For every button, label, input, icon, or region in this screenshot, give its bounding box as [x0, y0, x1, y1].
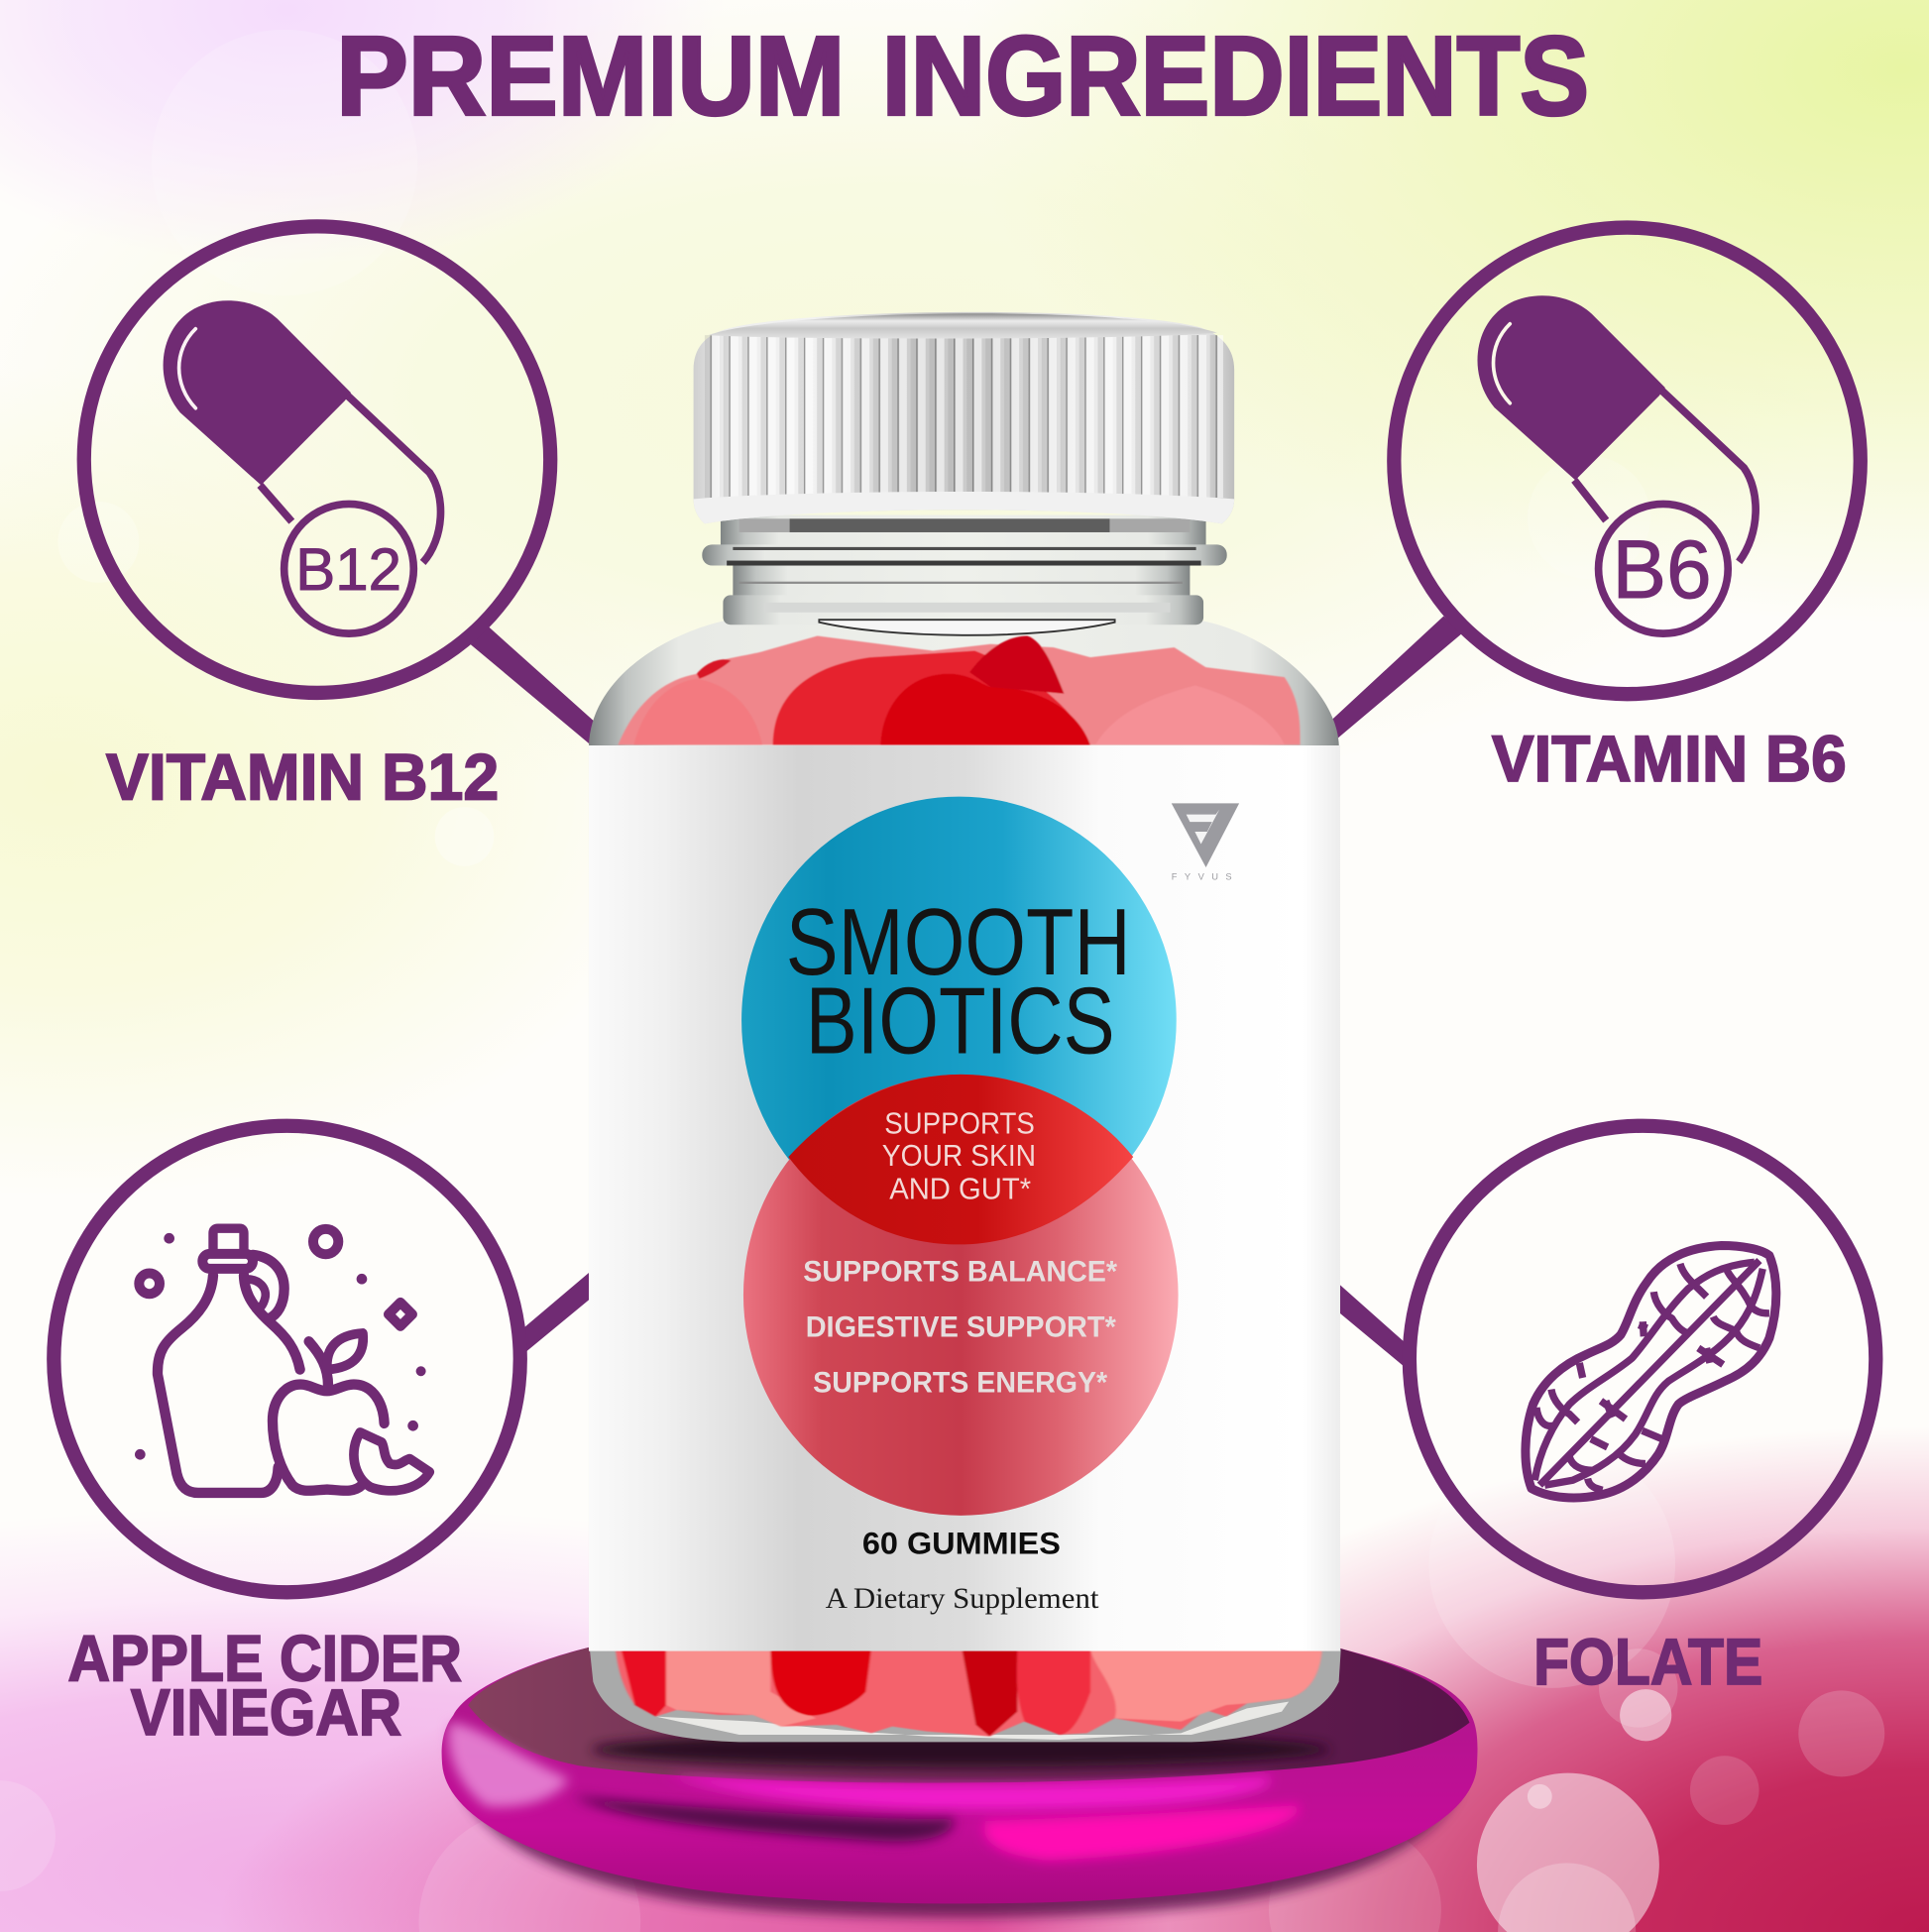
icon: peanut: [1526, 1246, 1776, 1498]
count: 60 GUMMIES: [862, 1526, 1061, 1560]
subtitle: A Dietary Supplement: [826, 1582, 1099, 1615]
icon: B6 capsule: [1477, 295, 1756, 633]
icon: vinegar bottle and apple: [135, 1228, 429, 1493]
benefits list: SUPPORTS BALANCE*: [803, 1256, 1117, 1289]
connector: vitamin B6 to bottle: [1325, 616, 1462, 739]
pedestal: [442, 1648, 1478, 1917]
overlap claim text: [882, 1107, 1036, 1205]
label: apple cider vinegar: APPLE CIDER: [67, 1621, 462, 1694]
product name: [786, 889, 1131, 1075]
title: PREMIUM: [336, 14, 845, 139]
benefits list: SUPPORTS ENERGY*: [813, 1367, 1108, 1400]
brand logo: FYVUS: [1172, 871, 1239, 881]
venn circle: red: [743, 1075, 1179, 1516]
overlap claim text: YOUR SKIN: [882, 1139, 1036, 1173]
gummies: bottom of jar: [590, 1648, 1341, 1742]
panel: vitamin B6: [1394, 228, 1861, 694]
label panel: [589, 745, 1340, 1651]
circle: apple cider vinegar: [54, 1126, 520, 1592]
icon: B12 capsule: [164, 300, 441, 633]
icon: B12 capsule: B12: [295, 535, 401, 603]
title: [336, 14, 1589, 139]
label: apple cider vinegar: VINEGAR: [131, 1675, 401, 1749]
panel: apple cider vinegar: [54, 1126, 520, 1592]
venn circle: blue: [741, 797, 1177, 1244]
icon: B6 capsule: B6: [1613, 523, 1712, 616]
overlap claim text: SUPPORTS: [884, 1107, 1035, 1141]
product name: SMOOTH: [786, 889, 1131, 995]
connector: folate to bottle: [1340, 1285, 1406, 1368]
panel: folate: [1410, 1126, 1875, 1592]
label: folate: FOLATE: [1533, 1625, 1762, 1698]
overlap claim text: AND GUT*: [889, 1172, 1031, 1205]
product name: BIOTICS: [806, 968, 1115, 1075]
product bottle: [589, 312, 1341, 1742]
title: INGREDIENTS: [882, 14, 1589, 139]
panel: vitamin B12: [84, 226, 550, 693]
bottle glass body: [589, 621, 1340, 1651]
venn overlap: [788, 1075, 1133, 1244]
bottle neck rings: [702, 515, 1227, 635]
brand logo: [1172, 803, 1239, 881]
label: vitamin B6: VITAMIN B6: [1492, 722, 1847, 795]
benefits list: DIGESTIVE SUPPORT*: [806, 1311, 1116, 1344]
benefits list: [803, 1256, 1117, 1400]
label: apple cider vinegar: [67, 1621, 462, 1749]
gummies: top of jar: [618, 635, 1301, 744]
label: vitamin B12: VITAMIN B12: [106, 740, 499, 814]
circle: vitamin B6: [1394, 228, 1861, 694]
connector: vitamin B12 to bottle: [471, 627, 595, 745]
circle: folate: [1410, 1126, 1875, 1592]
circle: vitamin B12: [84, 226, 550, 693]
connector: apple cider vinegar to bottle: [524, 1273, 589, 1353]
bottle cap: [694, 312, 1234, 523]
